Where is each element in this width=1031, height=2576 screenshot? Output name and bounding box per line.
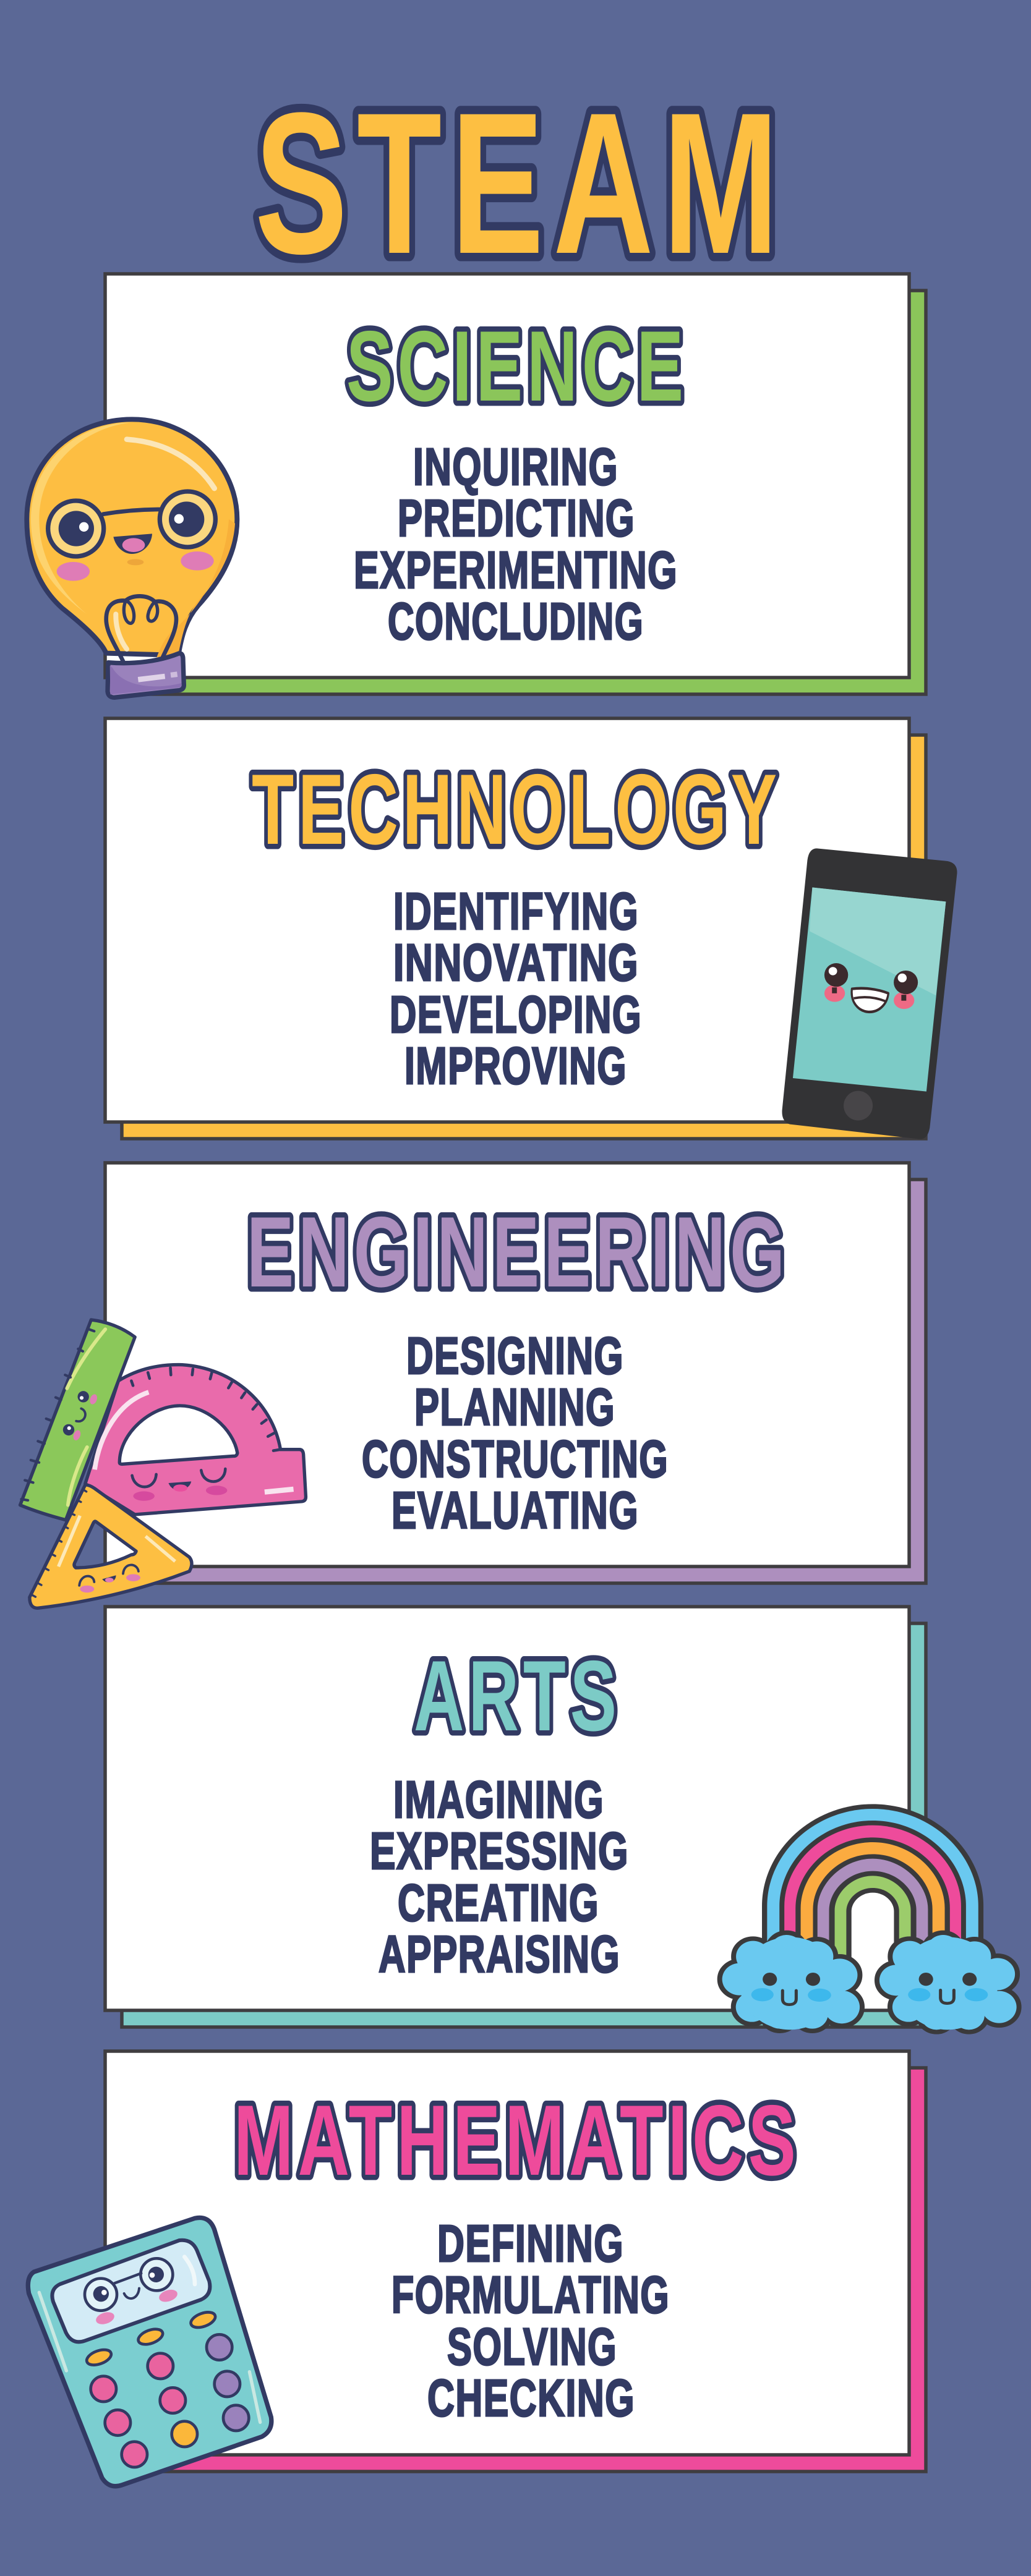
icon: smartphone [782,848,957,1139]
list: science verbs: INQUIRING [413,438,618,496]
list: engineering verbs: EVALUATING [391,1481,639,1539]
face: mouth and cheeks [57,533,214,581]
right cloud [879,1935,1017,2030]
list: technology verbs: IDENTIFYING [393,882,639,940]
panel: arts [105,1607,926,2027]
ruler [20,1320,135,1520]
face [85,2258,179,2326]
panel: science [105,274,926,694]
face [824,963,918,1012]
panel: technology [105,718,926,1139]
list: mathematics verbs: SOLVING [447,2318,617,2376]
list: science verbs [354,438,678,650]
heading: technology: TECHNOLOGY [252,754,781,865]
icon: rainbow with clouds [722,1804,1017,2030]
glasses [48,491,215,556]
list: arts verbs [370,1770,629,1983]
rainbow arches [762,1804,983,1960]
icon: protractor, ruler and set square [20,1320,306,1608]
heading: engineering: ENGINEERING [247,1196,789,1308]
set square [30,1485,192,1608]
list: engineering verbs [362,1327,669,1539]
home button [844,1091,873,1120]
list: mathematics verbs: FORMULATING [391,2266,670,2324]
list: mathematics verbs: CHECKING [427,2369,635,2427]
list: arts verbs: IMAGINING [393,1770,604,1829]
left cloud [722,1935,860,2030]
icon: calculator [28,2217,272,2486]
screen [52,2240,210,2342]
list: science verbs: CONCLUDING [388,592,644,650]
list: mathematics verbs: DEFINING [437,2214,624,2272]
list: science verbs: PREDICTING [398,489,635,547]
protractor [85,1365,306,1515]
title: STEAM: STEAM [255,71,788,296]
list: technology verbs [390,882,642,1095]
heading: science: SCIENCE [346,310,688,422]
list: technology verbs: INNOVATING [393,933,639,992]
list: science verbs: EXPERIMENTING [354,541,678,599]
list: arts verbs: APPRAISING [379,1925,620,1983]
list: mathematics verbs [391,2214,670,2427]
list: technology verbs: DEVELOPING [390,985,642,1044]
list: arts verbs: EXPRESSING [370,1822,629,1880]
panel: mathematics [105,2051,926,2472]
socket [108,653,184,697]
list: engineering verbs: PLANNING [414,1378,615,1436]
list: engineering verbs: DESIGNING [406,1327,624,1385]
list: technology verbs: IMPROVING [404,1037,627,1095]
heading: mathematics: MATHEMATICS [234,2085,800,2196]
screen [793,888,946,1092]
list: engineering verbs: CONSTRUCTING [362,1430,669,1488]
icon: light bulb [27,419,237,697]
list: arts verbs: CREATING [398,1874,599,1932]
keys [85,2310,249,2467]
filament [106,596,176,663]
heading: arts: ARTS [414,1640,621,1752]
panel: engineering [105,1163,926,1583]
